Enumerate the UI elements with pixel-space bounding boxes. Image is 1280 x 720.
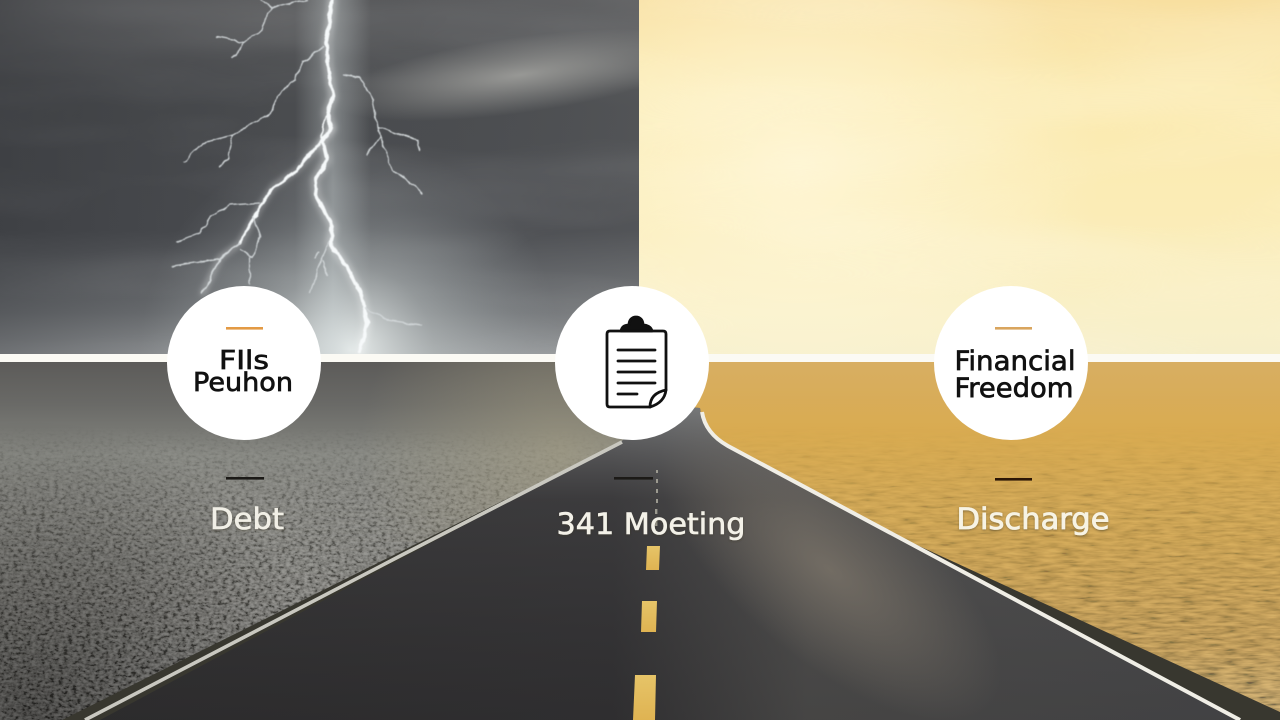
icon: clipboard document	[607, 317, 666, 407]
road edge line: left	[85, 442, 622, 720]
panel: grey gravel ground	[0, 362, 640, 720]
horizon line	[0, 354, 1280, 362]
separator: Discharge	[995, 478, 1032, 481]
step circle: File Petition	[167, 286, 321, 440]
icon: lightning bolt	[173, 0, 423, 352]
separator: Debt	[226, 477, 264, 480]
lane dashes	[633, 470, 660, 720]
orange accent	[226, 327, 263, 330]
road	[62, 405, 1280, 720]
panel: stormy sky	[0, 0, 639, 355]
label: 341 Meeting: 341 Moeting	[556, 507, 746, 541]
circle label: FIls	[219, 346, 269, 376]
label: Discharge: Discharge	[956, 502, 1110, 536]
step circle: Financial Freedom	[934, 286, 1088, 440]
circle label: Freedom	[954, 373, 1074, 404]
circle label: Peuhon	[193, 368, 293, 398]
orange accent	[995, 327, 1032, 330]
circle label	[193, 346, 293, 398]
panel: golden sand ground	[694, 362, 1280, 712]
label: Debt: Debt	[210, 502, 284, 536]
separator: 341 Meeting	[614, 477, 653, 480]
road shoulders	[62, 440, 1280, 720]
road edge line: right	[702, 412, 1240, 720]
panel: golden sky	[639, 0, 1280, 355]
circle label: Financial	[954, 346, 1076, 377]
circle label	[954, 346, 1076, 404]
step circle: clipboard	[555, 286, 709, 440]
